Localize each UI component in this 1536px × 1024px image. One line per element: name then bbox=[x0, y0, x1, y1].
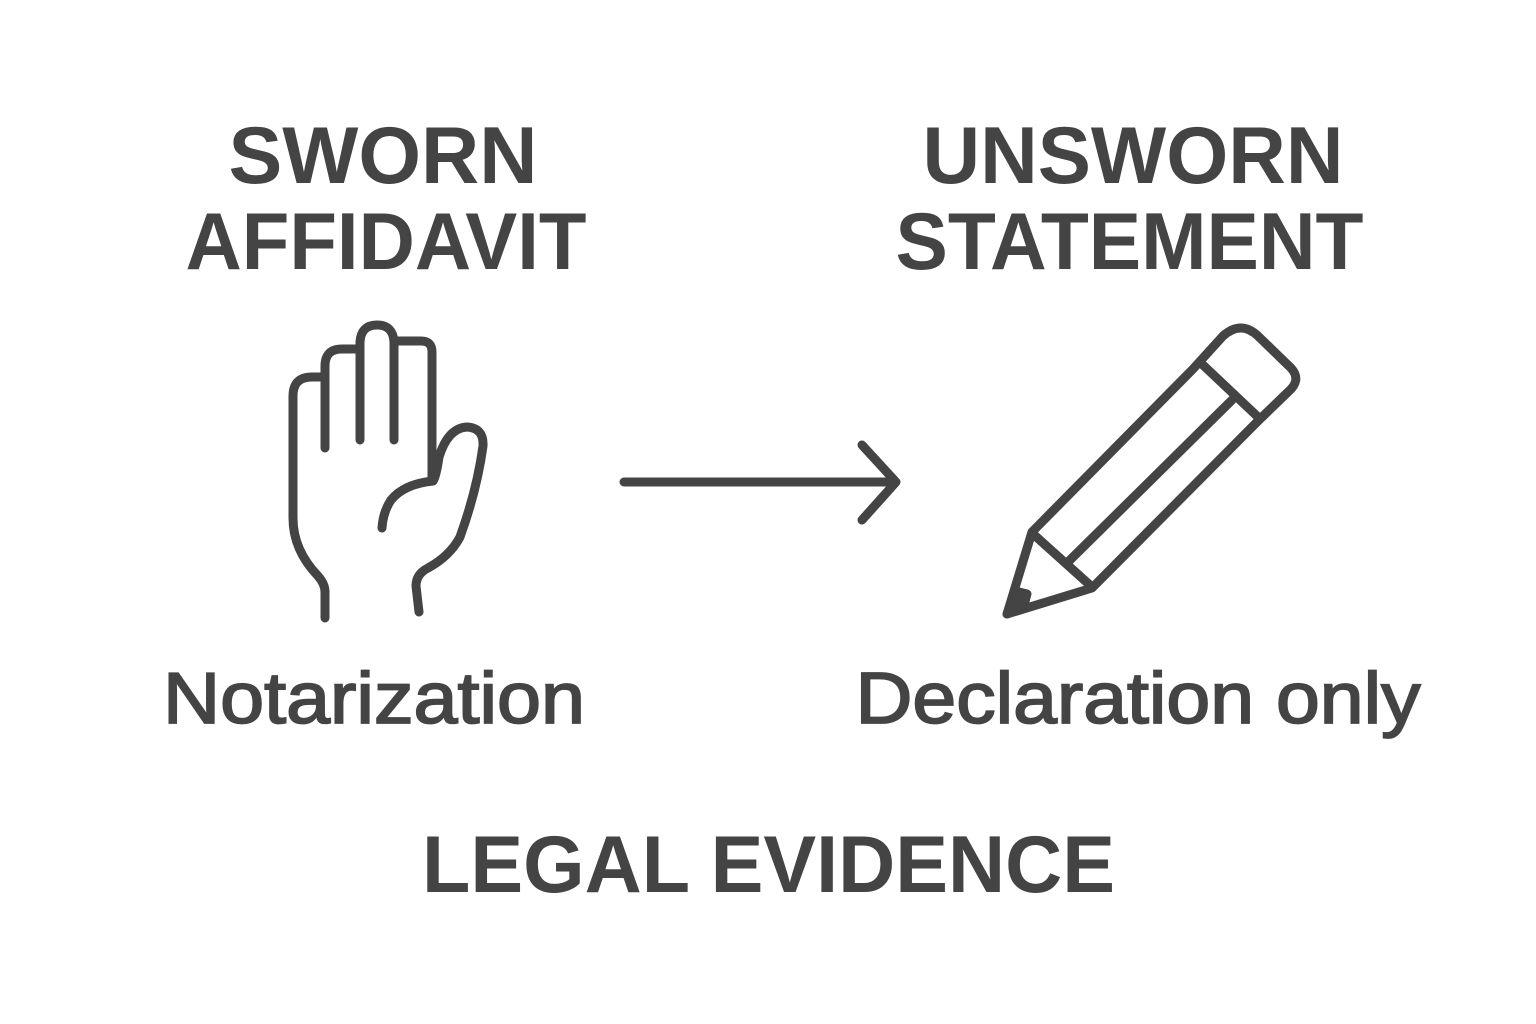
heading: unsworn statement bbox=[896, 111, 1364, 287]
heading: sworn affidavit bbox=[186, 111, 586, 287]
heading: unsworn statement: UNSWORN bbox=[922, 111, 1344, 201]
heading: sworn affidavit: SWORN bbox=[228, 111, 538, 201]
label: notarization: Notarization bbox=[163, 659, 585, 739]
footer title: legal evidence: LEGAL EVIDENCE bbox=[422, 820, 1115, 910]
label: declaration only: Declaration only bbox=[856, 659, 1420, 739]
icon: pencil bbox=[1007, 328, 1296, 614]
heading: unsworn statement: STATEMENT bbox=[896, 197, 1364, 287]
icon: raised hand bbox=[293, 325, 483, 618]
arrow: sworn to unsworn bbox=[624, 445, 896, 520]
heading: sworn affidavit: AFFIDAVIT bbox=[186, 197, 586, 287]
